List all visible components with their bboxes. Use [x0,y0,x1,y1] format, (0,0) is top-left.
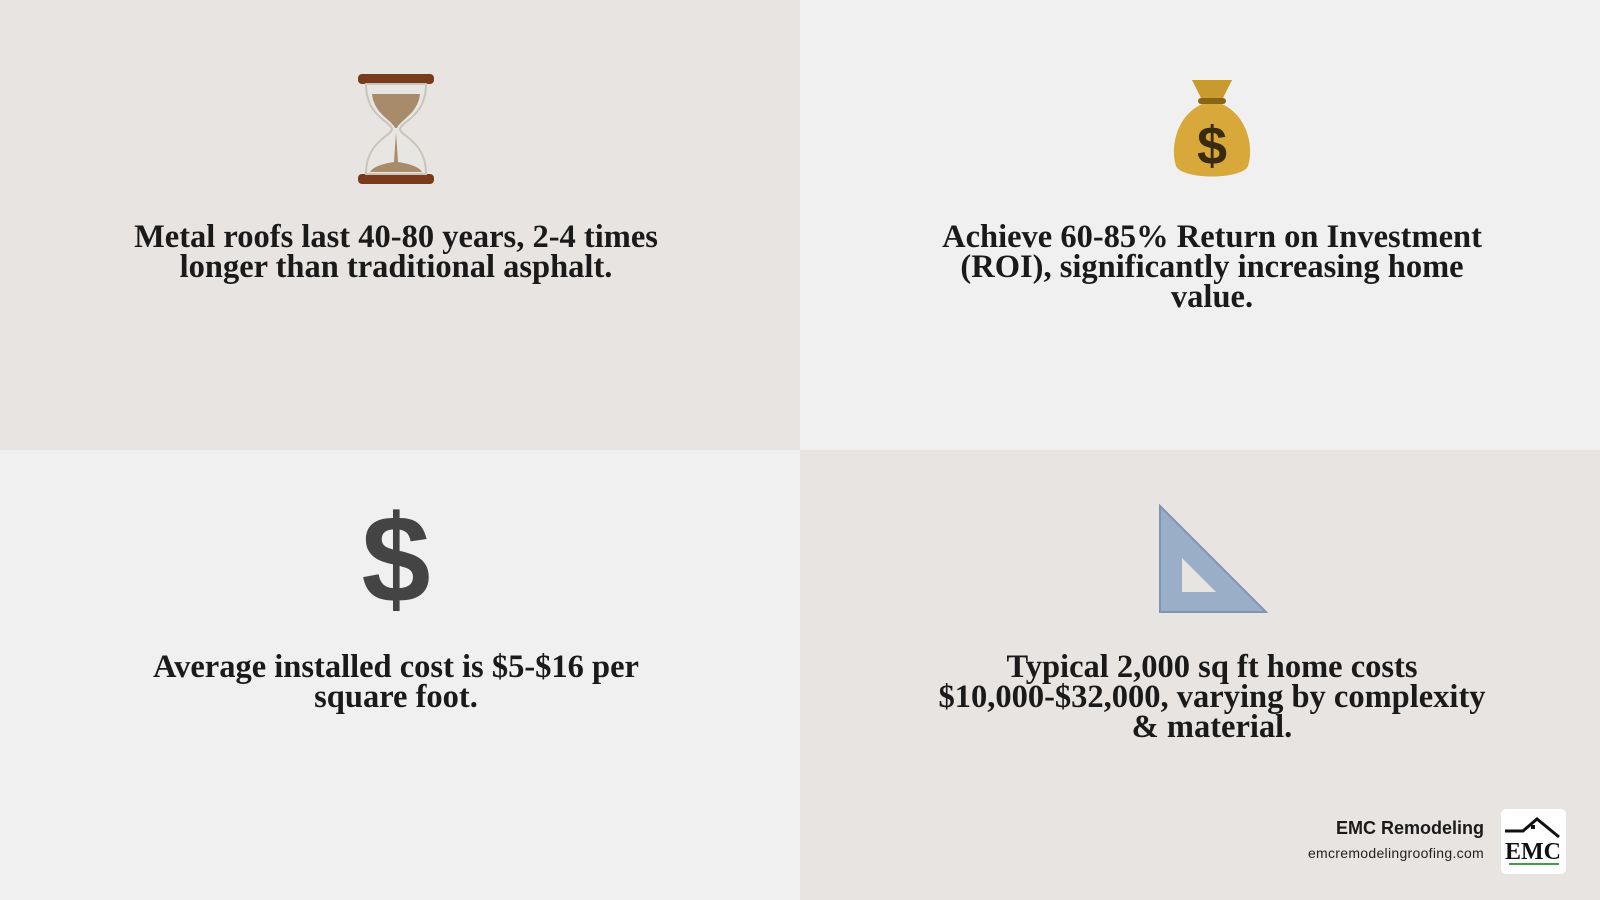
logo [1501,809,1566,874]
text: ROI: value. [1171,279,1253,315]
text: ROI: Achieve 60-85% Return on Investment [942,219,1482,255]
text: total cost: Typical 2,000 sq ft home costs [1006,649,1418,685]
logo: EMC [1505,839,1561,865]
text: lifespan [134,219,658,285]
text: cost: Average installed cost is $5-$16 per [153,649,639,685]
icon: hourglass [358,74,434,184]
icon: money bag: $ [1197,116,1227,176]
text: total cost: $10,000-$32,000, varying by complexity [938,679,1486,715]
brand url: emcremodelingroofing.com [1308,845,1484,861]
text: ROI: (ROI), significantly increasing home [960,249,1464,285]
panel: ROI [800,0,1600,450]
icon: money bag [1174,80,1250,176]
panel: total cost [800,450,1600,900]
text: cost: square foot. [314,679,478,715]
text: total cost [938,649,1486,745]
icon: triangle ruler [1159,504,1268,613]
text: lifespan: longer than traditional asphalt. [180,249,612,285]
text: lifespan: Metal roofs last 40-80 years, 2-4 times [134,219,658,255]
text: ROI [942,219,1482,315]
text: cost [153,649,639,715]
brand block [1308,809,1566,874]
icon: dollar sign: $ [362,491,430,629]
panel: cost per sq ft [0,450,800,900]
brand name: EMC Remodeling [1336,818,1484,838]
panel: lifespan [0,0,800,450]
text: total cost: & material. [1132,709,1292,745]
